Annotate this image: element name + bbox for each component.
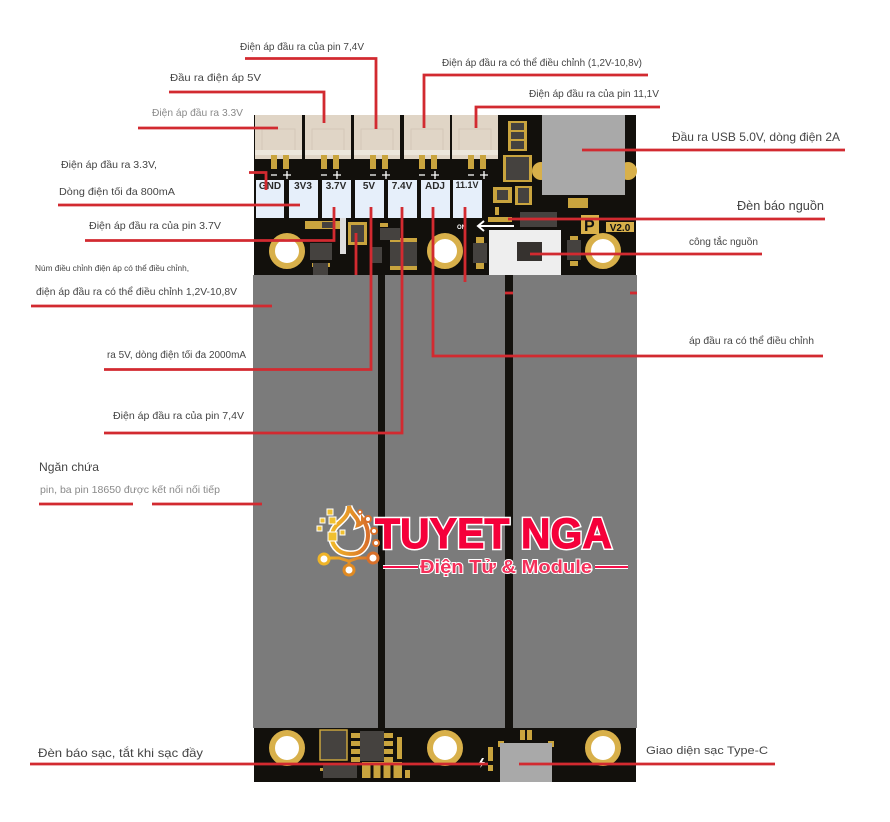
text labels: Điện áp đầu ra của pin 7,4V (240, 41, 364, 53)
icon: power switch (489, 230, 561, 276)
pin labels: 5V (363, 181, 375, 192)
icon: USB port (532, 115, 637, 195)
text labels: áp đầu ra có thể điều chỉnh (689, 335, 814, 347)
logo wordmark weight: TUYET NGA (375, 510, 612, 558)
text labels: Giao diện sạc Type-C (646, 745, 768, 757)
text labels: Đèn báo sạc, tắt khi sạc đầy (38, 745, 203, 760)
pin labels: ADJ (425, 181, 445, 192)
text labels: Ngăn chứa (39, 460, 99, 474)
board logo (581, 215, 634, 235)
panel: top circuit board (254, 115, 637, 280)
panel: bottom circuit board (254, 728, 636, 782)
logo tagline: Điện Tử & Module (420, 557, 592, 577)
text labels: Đầu ra điện áp 5V (170, 72, 261, 84)
text labels: Điện áp đầu ra 3.3V (152, 107, 243, 119)
pin labels (256, 180, 482, 218)
icon: Type-C port (498, 741, 554, 782)
text labels (35, 41, 840, 760)
text labels: Đèn báo nguồn (737, 198, 824, 213)
text labels: điện áp đầu ra có thể điều chỉnh 1,2V-10,8V (36, 286, 237, 298)
text labels: Điện áp đầu ra của pin 3.7V (89, 220, 221, 232)
pin labels: GND (259, 181, 281, 192)
board logo: V2.0 (610, 223, 631, 234)
text labels: Đầu ra USB 5.0V, dòng điện 2A (672, 130, 840, 144)
panel: battery holders (253, 275, 637, 728)
text labels: Điện áp đầu ra của pin 11,1V (529, 88, 659, 100)
icon: bottom mounting holes (272, 733, 618, 763)
board logo: P (584, 218, 595, 235)
icon: mounting holes (272, 236, 618, 266)
pin labels: 11.1V (455, 180, 479, 190)
text labels: ra 5V, dòng điện tối đa 2000mA (107, 349, 246, 361)
circuit components: ON (457, 225, 466, 231)
text labels: Núm điều chỉnh điện áp có thể điều chỉnh, (35, 264, 189, 273)
icon: JST connectors (255, 115, 498, 179)
pin labels: 3.7V (326, 181, 347, 192)
bottom components (320, 730, 532, 778)
text labels: Điện áp đầu ra có thể điều chỉnh (1,2V-10,8v) (442, 57, 642, 69)
text labels: pin, ba pin 18650 được kết nối nối tiếp (40, 484, 220, 496)
logo: Tuyet Nga (317, 506, 628, 577)
pin labels: 7.4V (392, 181, 413, 192)
red leader lines (30, 58, 845, 764)
circuit components (305, 121, 588, 275)
text labels: Dòng điện tối đa 800mA (59, 186, 175, 198)
icon: flame circuit (317, 506, 379, 575)
pin labels: 3V3 (294, 181, 312, 192)
icon: ON arrow (478, 221, 514, 231)
text labels: công tắc nguồn (689, 235, 758, 248)
text labels: Điện áp đầu ra của pin 7,4V (113, 410, 244, 422)
text labels: Điện áp đầu ra 3.3V, (61, 159, 157, 171)
logo wordmark: TUYET NGA (375, 510, 612, 558)
